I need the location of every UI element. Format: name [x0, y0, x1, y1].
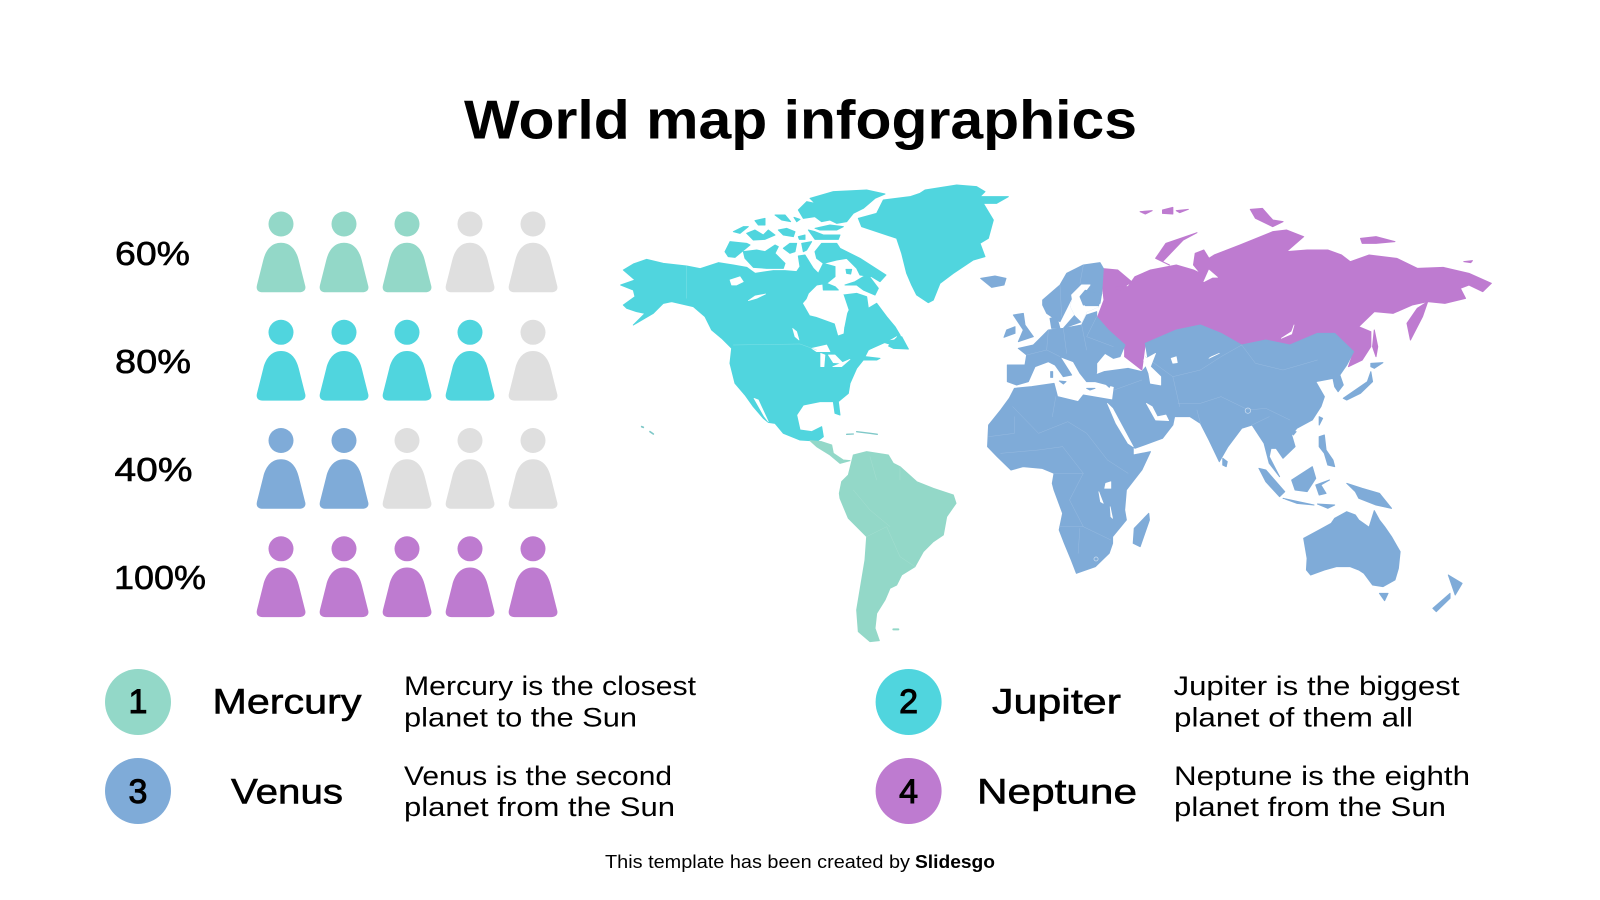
legend: Jupiter	[876, 669, 1460, 735]
row: 40%	[114, 428, 557, 509]
legend: Jupiter: Jupiter is the biggest	[1174, 671, 1460, 701]
row: 100%	[114, 536, 557, 617]
region: Asia	[1095, 325, 1391, 508]
region: Arctic Canada	[725, 190, 886, 295]
legend: Neptune: 4	[899, 773, 918, 811]
world map	[621, 185, 1491, 642]
footer credit: Slidesgo	[915, 852, 995, 872]
legend: Neptune: Neptune is the eighth	[1174, 761, 1470, 791]
region: Russia	[1097, 207, 1491, 370]
row: 60%	[115, 212, 557, 292]
legend: Venus	[105, 758, 675, 824]
legend: Neptune	[876, 758, 1470, 824]
region: Europe	[981, 263, 1125, 390]
row: 40%: 40%	[114, 451, 192, 488]
row: 60%: 60%	[115, 235, 190, 272]
footer credit: This template has been created by	[605, 852, 910, 872]
title: World map infographics	[464, 88, 1137, 150]
legend: Venus: planet from the Sun	[404, 792, 675, 822]
Hudson Bay and lakes	[730, 277, 897, 422]
legend: Mercury: Mercury is the closest	[404, 671, 697, 701]
legend: Mercury	[105, 669, 697, 735]
region: South America	[810, 441, 956, 642]
legend: Mercury: planet to the Sun	[404, 702, 637, 732]
region: Africa and Oceania	[988, 353, 1462, 612]
region: Greenland	[858, 185, 1008, 303]
legend: Jupiter: 2	[899, 683, 918, 721]
legend: Jupiter: planet of them all	[1174, 702, 1413, 732]
legend: Jupiter: Jupiter	[992, 682, 1121, 722]
legend: Neptune: Neptune	[977, 772, 1137, 812]
islands	[1343, 372, 1373, 400]
row: 100%: 100%	[114, 559, 206, 596]
region: North America	[621, 255, 908, 442]
legend: Venus: Venus	[231, 772, 343, 812]
legend: Mercury: 1	[129, 683, 147, 721]
row: 80%: 80%	[115, 343, 191, 380]
legend: Mercury: Mercury	[212, 682, 362, 722]
legend: Venus: Venus is the second	[404, 761, 672, 791]
legend: Venus: 3	[129, 773, 147, 811]
row: 80%	[115, 320, 557, 401]
seas and lakes	[1099, 353, 1219, 518]
legend: Neptune: planet from the Sun	[1174, 792, 1446, 822]
pictogram chart	[114, 212, 557, 617]
